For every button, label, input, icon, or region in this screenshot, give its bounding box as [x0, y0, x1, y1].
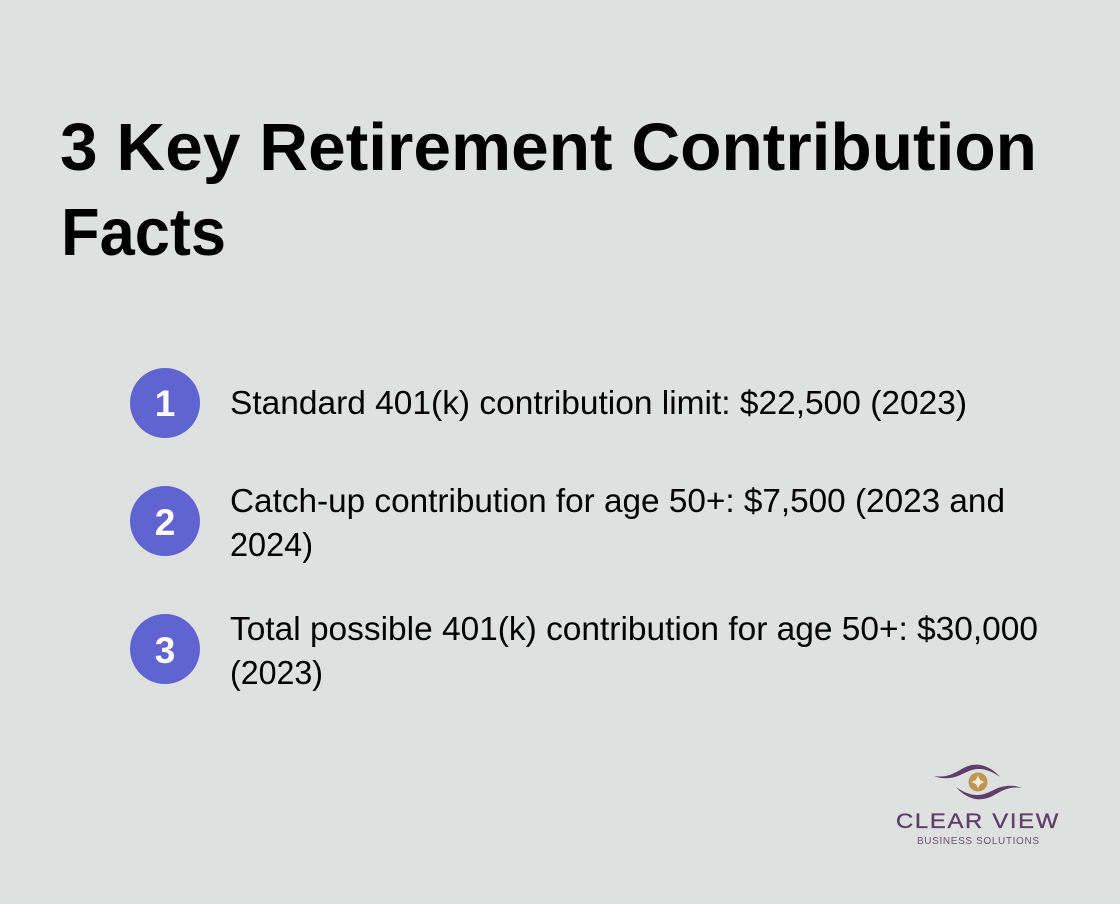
title	[60, 110, 1037, 270]
number badge 1	[130, 368, 200, 438]
title: Facts	[61, 195, 226, 270]
fact 2 text	[230, 482, 1005, 563]
fact 2 text: 2024)	[230, 526, 313, 563]
number badge 3	[130, 614, 200, 684]
fact 3 text: Total possible 401(k) contribution for age 50+: $30,000	[230, 610, 1038, 647]
fact 3 text	[230, 610, 1038, 691]
fact 2	[130, 482, 1005, 563]
logo wordmark: CLEAR VIEW	[896, 809, 1060, 833]
fact 1	[130, 368, 967, 438]
icon: eye with star	[934, 765, 1022, 799]
title: 3 Key Retirement Contribution	[60, 110, 1037, 185]
logo tagline: BUSINESS SOLUTIONS	[917, 836, 1039, 847]
number badge 1: 1	[155, 383, 175, 424]
fact 3 text: (2023)	[230, 654, 323, 691]
number badge 2: 2	[155, 502, 175, 543]
number badge 2	[130, 486, 200, 556]
number badge 3: 3	[155, 630, 175, 671]
fact 1 text: Standard 401(k) contribution limit: $22,500 (2023)	[230, 384, 967, 421]
logo: Clear View Business Solutions	[896, 765, 1060, 847]
fact 3	[130, 610, 1038, 691]
fact 2 text: Catch-up contribution for age 50+: $7,500 (2023 and	[230, 482, 1005, 519]
